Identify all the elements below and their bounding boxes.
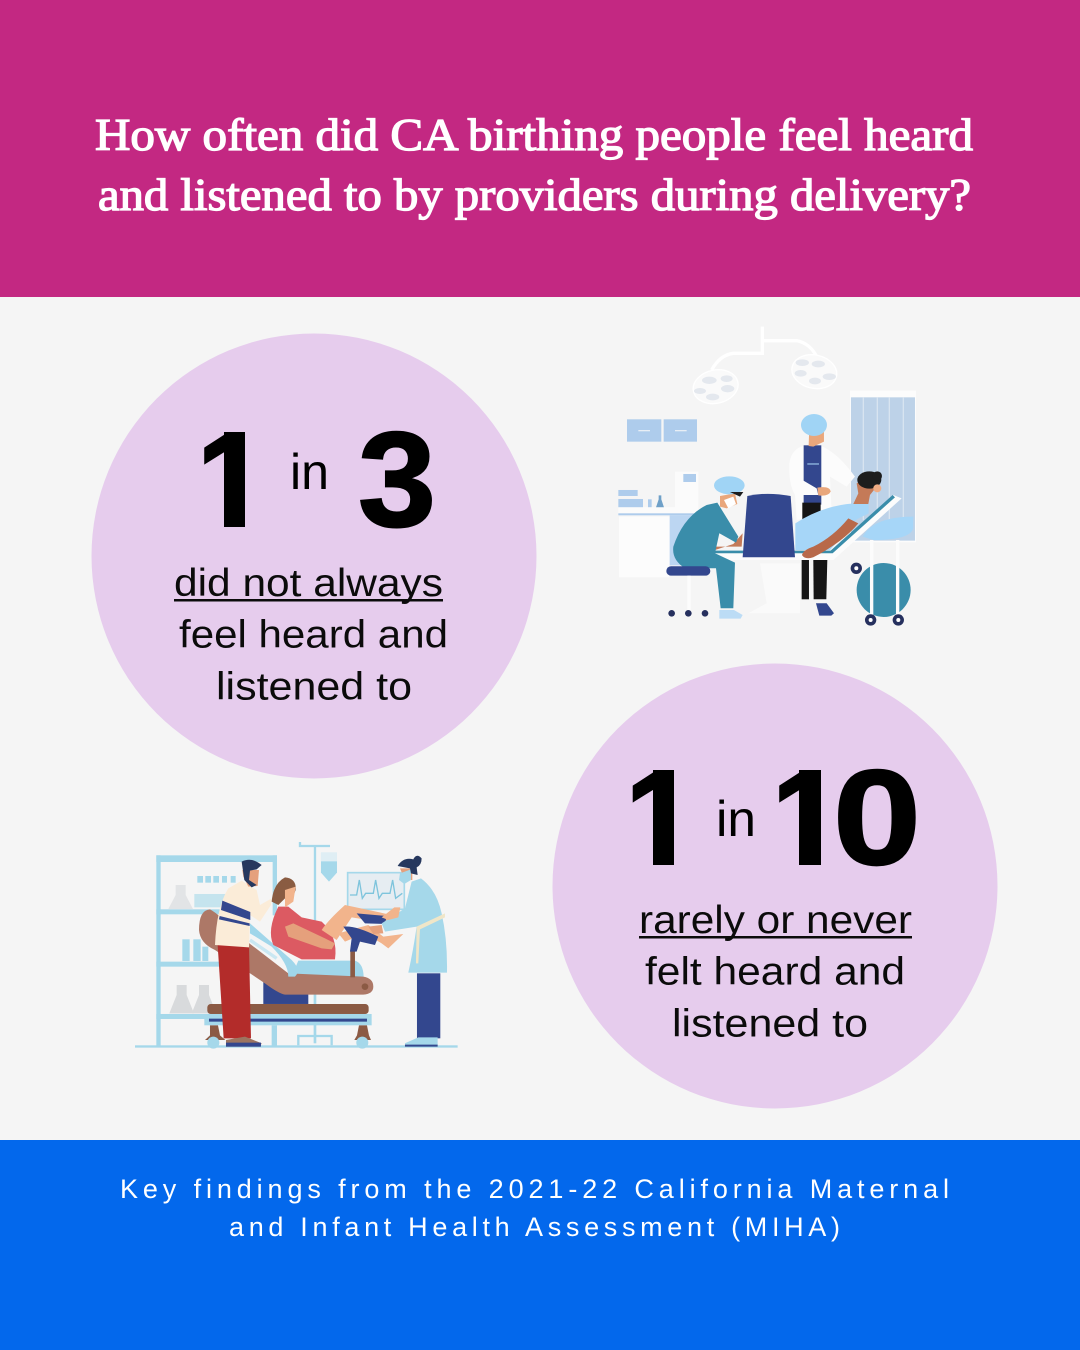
stat text: did not always feel heard and listened to: did not always (174, 562, 443, 605)
stat: 1 in 10: 1 (624, 742, 700, 893)
illustration: labour room scene (135, 842, 458, 1049)
standing doctor (789, 414, 855, 616)
labouring woman (271, 877, 403, 959)
footer text (120, 1174, 949, 1242)
midwife (368, 856, 447, 1047)
stat text: did not always feel heard and listened to: listened to (216, 666, 412, 708)
stat text: rarely or never felt heard and listened to: felt heard and (645, 950, 905, 994)
heart monitor (348, 873, 404, 909)
panel: 1 in 3 stat circle (92, 334, 536, 778)
flasks and test tubes (168, 876, 244, 1013)
stool (666, 566, 710, 617)
header panel (0, 0, 1080, 297)
footer text: and Infant Health Assessment (MIHA) (229, 1212, 840, 1242)
panel: 1 in 10 stat circle (552, 664, 998, 1108)
stat: 1 in 10: 1 (771, 742, 846, 893)
stat: 1 in 10: in (716, 791, 756, 847)
stat: 1 in 3: 3 (358, 404, 436, 555)
shelf (156, 855, 277, 1046)
patient (795, 471, 882, 558)
bed base (204, 982, 372, 1049)
wall cabinets (627, 419, 697, 442)
stat text: did not always feel heard and listened to (174, 562, 448, 708)
floor line (135, 1045, 458, 1048)
counter and equipment (618, 472, 703, 577)
stat: 1 in 10 (632, 768, 916, 866)
illustration: operating room delivery scene (618, 327, 916, 626)
title: and listened to by providers during delivery? (98, 170, 971, 220)
seated doctor (673, 476, 745, 619)
oxygen tank (851, 540, 911, 626)
title: How often did CA birthing people feel heard (95, 110, 973, 160)
window curtain (850, 391, 916, 542)
stat: 1 in 3: 1 (196, 404, 271, 555)
patient bed (710, 495, 913, 617)
stat: 1 in 3 (204, 430, 432, 528)
stat: 1 in 10: 0 (833, 742, 921, 893)
stat: 1 in 3: in (290, 444, 329, 500)
bed (199, 909, 373, 995)
stat text: did not always feel heard and listened to: feel heard and (179, 614, 448, 656)
stirrups (343, 913, 387, 952)
surgical lamps (690, 327, 840, 408)
stat text: rarely or never felt heard and listened to: rarely or never (639, 899, 912, 942)
bed base (748, 563, 800, 613)
partner (215, 860, 272, 1047)
drape (743, 494, 795, 557)
stat text: rarely or never felt heard and listened to: listened to (672, 1002, 868, 1046)
title (95, 110, 973, 220)
stat text: rarely or never felt heard and listened to (639, 899, 912, 1046)
IV stand (300, 842, 337, 1043)
footer panel (0, 1140, 1080, 1350)
footer text: Key findings from the 2021-22 California Maternal (120, 1174, 949, 1204)
